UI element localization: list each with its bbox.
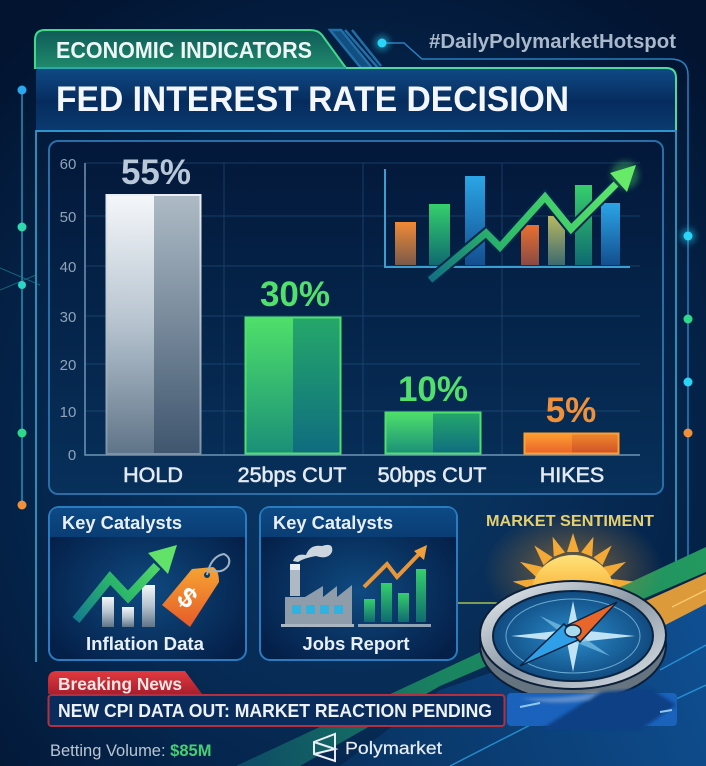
card: jobs report xyxy=(260,507,457,660)
diagonal stripes decor xyxy=(330,30,381,68)
title banner xyxy=(36,68,676,131)
bar: 50bps cut 10%: 50bps CUT xyxy=(378,463,486,487)
market sentiment: MARKET SENTIMENT xyxy=(486,513,655,530)
icon: compass xyxy=(480,581,666,701)
breaking news ticker: Breaking News xyxy=(58,674,182,694)
icon: factory xyxy=(281,545,354,627)
icon: rising arrow with bars xyxy=(76,545,177,627)
inset trend chart xyxy=(385,161,639,280)
y axis: 30 xyxy=(60,309,76,326)
diagonal ribbon xyxy=(236,547,706,766)
circuit decorations xyxy=(0,35,696,603)
panel: main frame xyxy=(35,30,676,662)
y axis: 20 xyxy=(60,357,76,374)
bar: hikes 5% xyxy=(524,391,619,487)
blue ticker end xyxy=(507,686,677,730)
market sentiment xyxy=(480,510,666,701)
polymarket logo: Polymarket xyxy=(345,738,442,758)
bar: hold 55%: 55% xyxy=(121,153,191,192)
title banner: FED INTEREST RATE DECISION xyxy=(56,79,569,119)
bar: hikes 5%: HIKES xyxy=(540,463,604,487)
bar: 25bps cut 30%: 30% xyxy=(260,275,330,314)
card: jobs report: Key Catalysts xyxy=(273,512,393,533)
y axis: 40 xyxy=(60,259,76,276)
bar: 50bps cut 10%: 10% xyxy=(398,370,468,409)
polymarket logo xyxy=(314,734,442,761)
icon: sun xyxy=(512,533,634,592)
card: jobs report: Jobs Report xyxy=(302,633,410,654)
hashtag: #DailyPolymarketHotspot xyxy=(429,30,676,53)
bar: 25bps cut 30%: 25bps CUT xyxy=(238,463,346,487)
y axis: 50 xyxy=(60,209,76,226)
bar: hold 55%: HOLD xyxy=(123,463,183,487)
grid lines xyxy=(85,163,640,455)
card: inflation data: Inflation Data xyxy=(86,633,205,654)
icon: price tag: $ xyxy=(171,581,204,615)
card: inflation data: Key Catalysts xyxy=(62,512,182,533)
card: inflation data xyxy=(49,507,246,660)
y axis: 60 xyxy=(60,156,76,173)
panel: bar chart xyxy=(49,141,663,494)
breaking news ticker xyxy=(48,671,504,726)
icon: bars with orange arrow xyxy=(358,545,431,627)
y axis: 10 xyxy=(60,404,76,421)
bar: 50bps cut 10% xyxy=(378,370,486,487)
tab: economic indicators xyxy=(35,30,346,68)
betting volume: Betting Volume: $85M xyxy=(50,742,211,760)
tab: economic indicators: ECONOMIC INDICATORS xyxy=(56,37,312,63)
bar: 25bps cut 30% xyxy=(238,275,346,487)
icon: price tag xyxy=(162,554,229,627)
y axis xyxy=(60,156,640,464)
bar: hikes 5%: 5% xyxy=(546,391,596,430)
y axis: 0 xyxy=(68,447,76,464)
breaking news ticker: NEW CPI DATA OUT: MARKET REACTION PENDING xyxy=(58,701,492,721)
bar: hold 55% xyxy=(106,153,201,487)
